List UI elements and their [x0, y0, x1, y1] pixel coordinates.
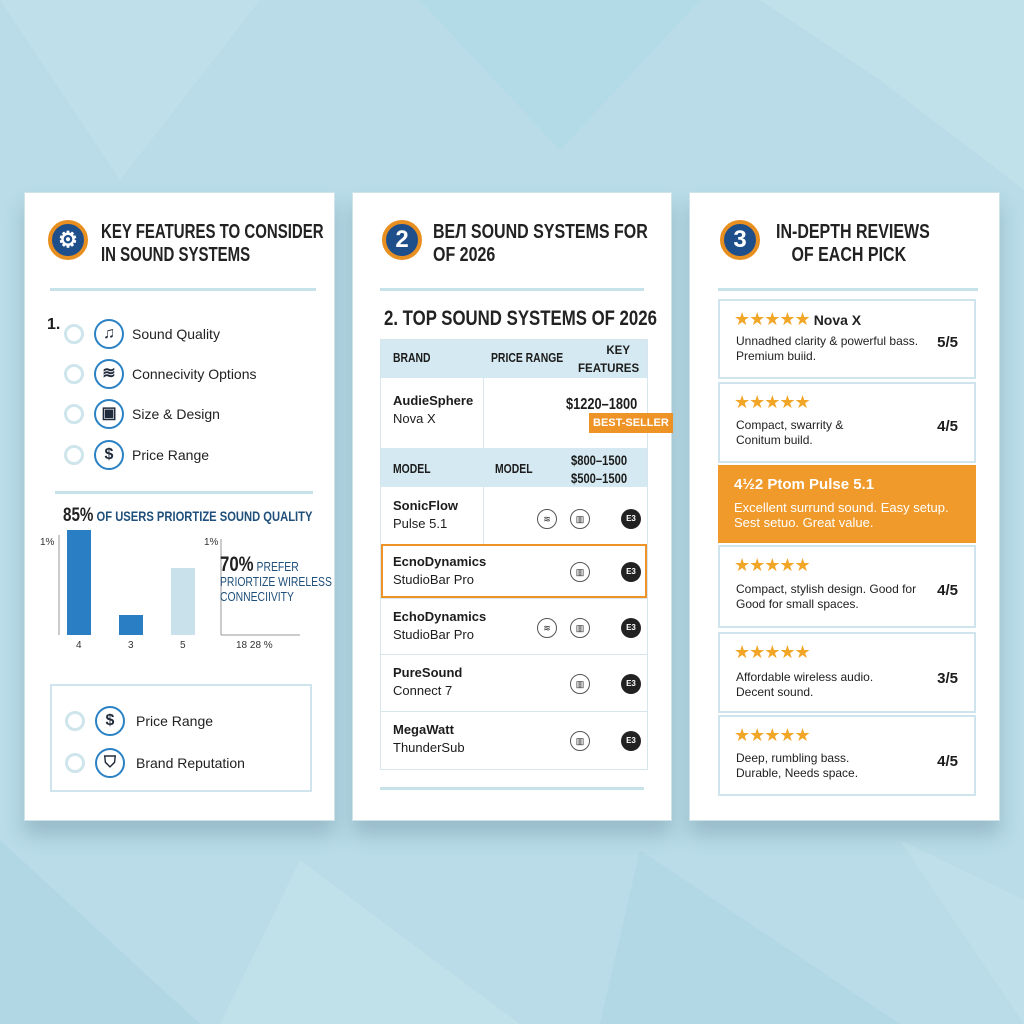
table: $800–1500 — [571, 452, 627, 468]
review: highlighted pulse: Sest setuo. Great value. — [734, 515, 873, 530]
review: compact: Compact, swarrity & — [736, 418, 843, 432]
panel: key features — [24, 192, 335, 821]
table: ▥ — [576, 514, 584, 524]
heading: reviews: OF EACH PICK — [791, 244, 906, 266]
heading: key features: KEY FEATURES TO CONSIDER — [101, 221, 324, 243]
feature list: ≋ — [102, 365, 116, 382]
table: ▥ — [576, 679, 584, 689]
table: MODEL — [393, 461, 431, 476]
box: price & brand: Price Range — [136, 713, 213, 729]
review: affordable: ★★★★★ — [734, 642, 810, 662]
feature list: Sound Quality — [132, 326, 220, 342]
review: bass — [718, 715, 976, 796]
feature list: 1. — [47, 316, 60, 333]
bar chart: 18 28 % — [236, 640, 273, 651]
review: affordable: Decent sound. — [736, 685, 813, 699]
review: highlighted pulse — [718, 465, 976, 543]
table: MegaWatt — [393, 722, 454, 737]
bar chart: 1% — [204, 537, 219, 548]
stat: 70% wireless: PRIORTIZE WIRELESS — [220, 574, 332, 589]
panel: reviews — [689, 192, 1000, 821]
table: ▥ — [576, 736, 584, 746]
table: StudioBar Pro — [393, 627, 474, 642]
stat: 70% wireless: CONNECIIVITY — [220, 589, 294, 604]
bar chart: 3 — [128, 640, 134, 651]
table: ThunderSub — [393, 740, 465, 755]
table: E3 — [626, 567, 636, 576]
table: FEATURES — [578, 363, 639, 375]
review: Nova X: Unnadhed clarity & powerful bass. — [736, 334, 918, 348]
review: compact: 4/5 — [937, 418, 958, 435]
table: ▥ — [576, 623, 584, 633]
review: stylish: Compact, stylish design. Good for — [736, 582, 916, 596]
heading: reviews: IN-DEPTH REVIEWS — [776, 221, 930, 243]
table: PureSound — [393, 665, 462, 680]
review: stylish: ★★★★★ — [734, 555, 810, 575]
box: price & brand — [50, 684, 312, 792]
review: Nova X: ★★★★★ Nova X — [734, 309, 861, 329]
review: compact — [718, 382, 976, 463]
table: StudioBar Pro — [393, 572, 474, 587]
review: stylish: Good for small spaces. — [736, 597, 859, 611]
icon: gear badge: ⚙ — [58, 227, 78, 252]
table: E3 — [626, 679, 636, 688]
icon: number 3: 3 — [733, 226, 747, 253]
feature list: Price Range — [132, 447, 209, 463]
table: PRICE RANGE — [491, 350, 563, 365]
feature list: Size & Design — [132, 406, 220, 422]
table: $500–1500 — [571, 470, 627, 486]
box: price & brand: $ — [106, 712, 114, 729]
stat: 70% wireless: 70% PREFER — [220, 553, 299, 576]
heading: key features — [101, 221, 324, 266]
heading: best systems: OF 2026 — [433, 244, 495, 266]
review: compact: Conitum build. — [736, 433, 813, 447]
table: E3 — [626, 514, 636, 523]
heading: best systems — [433, 221, 648, 266]
table: E3 — [626, 736, 636, 745]
box: price & brand: ⛉ — [104, 754, 116, 771]
stat: 70% wireless — [220, 553, 332, 604]
bar chart: 1% — [40, 537, 55, 548]
table: MODEL — [495, 461, 533, 476]
table: BRAND — [393, 350, 431, 365]
feature list: $ — [105, 446, 113, 463]
table: EcnoDynamics — [393, 554, 486, 569]
table: Connect 7 — [393, 683, 452, 698]
review: affordable — [718, 632, 976, 713]
row: highlighted — [381, 544, 647, 598]
review: bass: Durable, Needs space. — [736, 766, 858, 780]
heading: best systems: BEЛ SOUND SYSTEMS FOR — [433, 221, 648, 243]
review: Nova X: Premium buiid. — [736, 349, 816, 363]
bar chart: 4 — [76, 640, 82, 651]
table: E3 — [626, 623, 636, 632]
review: bass: ★★★★★ — [734, 725, 810, 745]
table: $1220–1800 — [566, 396, 637, 413]
review: highlighted pulse: Excellent surrund sound. Easy setup. — [734, 500, 949, 515]
feature list: ♫ — [103, 325, 115, 342]
bar chart — [40, 530, 300, 651]
table: Pulse 5.1 — [393, 516, 447, 531]
review: highlighted pulse: 4½2 Ptom Pulse 5.1 — [734, 476, 874, 493]
heading: key features: IN SOUND SYSTEMS — [101, 244, 250, 266]
table: EchoDynamics — [393, 609, 486, 624]
bar chart: 5 — [180, 640, 186, 651]
feature list: Connecivity Options — [132, 366, 257, 382]
icon: gear badge — [48, 220, 88, 260]
table: ≋ — [543, 623, 551, 633]
review: bass: 4/5 — [937, 753, 958, 770]
feature list — [47, 316, 257, 470]
review: affordable: 3/5 — [937, 670, 958, 687]
stat heading: 85% OF USERS PRIORTIZE SOUND QUALITY — [63, 505, 312, 526]
review: compact: ★★★★★ — [734, 392, 810, 412]
feature list: ▣ — [101, 405, 117, 422]
table: ▥ — [576, 567, 584, 577]
table — [380, 339, 648, 770]
review: affordable: Affordable wireless audio. — [736, 670, 873, 684]
panel: best systems — [352, 192, 672, 821]
table: Nova X — [393, 411, 436, 426]
review: Nova X — [718, 299, 976, 379]
icon: number 2: 2 — [395, 226, 409, 253]
review: stylish — [718, 545, 976, 628]
table: SonicFlow — [393, 498, 458, 513]
icon: number 3 — [720, 220, 760, 260]
review: bass: Deep, rumbling bass. — [736, 751, 849, 765]
table: ≋ — [543, 514, 551, 524]
box: price & brand: Brand Reputation — [136, 755, 245, 771]
subheading: 2. TOP SOUND SYSTEMS OF 2026 — [384, 307, 657, 330]
review: Nova X: 5/5 — [937, 334, 958, 351]
review: stylish: 4/5 — [937, 582, 958, 599]
badge: best-seller: BEST-SELLER — [593, 417, 669, 429]
heading: reviews — [776, 221, 930, 266]
table: AudieSphere — [393, 393, 473, 408]
icon: number 2 — [382, 220, 422, 260]
table: KEY — [606, 345, 630, 357]
badge: best-seller — [589, 413, 673, 433]
